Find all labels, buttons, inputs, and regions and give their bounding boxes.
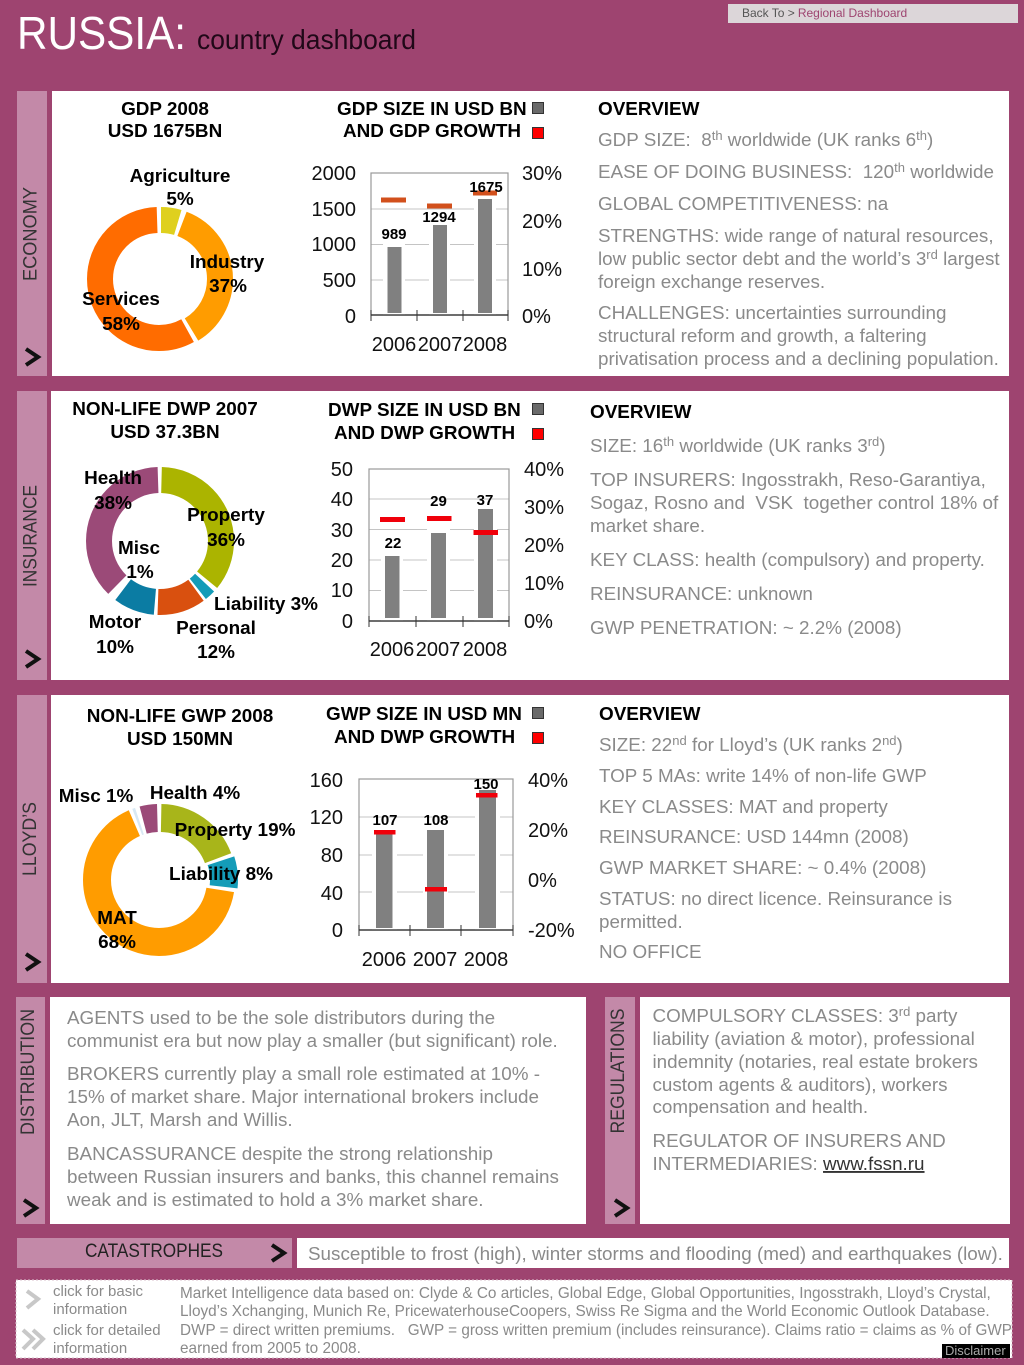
text block: lloyd's overview: nd — [672, 733, 687, 748]
text block: regulations: rd — [899, 1004, 910, 1019]
donut chart: non-life DWP by class: Misc — [118, 538, 160, 559]
text block: regulations: party — [910, 1005, 958, 1026]
text block: insurance overview: SIZE: 16 — [590, 435, 663, 456]
disclaimer button: Disclaimer — [945, 1343, 1006, 1358]
bar chart: DWP — [331, 459, 564, 661]
bar chart: DWP: 0% — [524, 611, 553, 633]
text block: sources: Market Intelligence data based on: Clyde & Co articles, Global Edge, Global Opportunities, Ingosstrakh, Lloyd’s Crystal, — [180, 1285, 991, 1302]
insurance side tab — [17, 391, 47, 680]
text block: economy overview: worldwide — [905, 161, 994, 182]
heading: GDP 2008: GDP 2008 — [121, 99, 209, 120]
text block: insurance overview: rd — [868, 434, 879, 449]
donut chart: non-life DWP by class: 36% — [207, 530, 245, 551]
donut chart: GDP by sector: Agriculture — [130, 166, 230, 187]
bar chart: GWP: 108 — [423, 812, 449, 829]
text block: economy overview — [598, 99, 1000, 369]
icon: single chevron key — [27, 1291, 38, 1308]
bar chart: GDP: 2008 — [463, 334, 507, 356]
bar chart: GDP: 1294 — [422, 209, 456, 226]
donut chart: non-life GWP by class: Liability 8% — [169, 864, 273, 885]
bar chart: DWP: 30% — [524, 497, 564, 519]
bar chart: GWP: 0 — [332, 920, 343, 942]
text block: lloyd's overview: ) — [897, 734, 903, 755]
heading: non-life DWP 2007 — [72, 399, 258, 443]
text block: regulations: indemnity (notaries, real estate brokers — [652, 1051, 978, 1072]
bar chart: GDP: 500 — [323, 270, 356, 292]
text block: economy overview: th — [712, 128, 723, 143]
donut chart: GDP by sector: 5% — [166, 189, 194, 210]
text block: insurance overview: KEY CLASS: health (compulsory) and property. — [590, 549, 985, 570]
distribution side tab — [16, 997, 45, 1224]
text block: insurance overview: OVERVIEW — [590, 402, 692, 423]
heading: GDP size and growth with legend: AND GDP GROWTH — [343, 121, 521, 142]
title: RUSSIA: — [17, 7, 186, 59]
text block: regulations: custom agents & auditors), workers — [652, 1074, 948, 1095]
donut chart: GDP by sector: 58% — [102, 314, 140, 335]
bar chart: GWP: 160 — [310, 770, 343, 792]
text block: economy overview: GDP SIZE: 8 — [598, 129, 712, 150]
bar chart: DWP: 2008 — [463, 639, 507, 661]
donut chart: non-life DWP by class: 1% — [126, 562, 154, 583]
text block: insurance overview: market share. — [590, 515, 705, 536]
catastrophes tab: CATASTROPHES — [85, 1241, 223, 1262]
text block: economy overview: OVERVIEW — [598, 99, 700, 120]
panel: catastrophes — [17, 1238, 1009, 1268]
bar chart: GDP: 20% — [522, 211, 562, 233]
text block: lloyd's overview: NO OFFICE — [599, 941, 702, 962]
donut chart: non-life DWP by class: 38% — [94, 493, 132, 514]
donut chart: GDP by sector: Services — [82, 289, 160, 310]
bar chart: GWP: -20% — [528, 920, 575, 942]
text block: insurance overview: Sogaz, Rosno and VSK together control 18% of — [590, 492, 999, 513]
bar chart: DWP: 50 — [331, 459, 353, 481]
text block: lloyd's overview: nd — [882, 733, 897, 748]
donut chart: non-life GWP by class: Property 19% — [175, 820, 296, 841]
text block: economy overview: rd — [926, 247, 938, 262]
text block: lloyd's overview: REINSURANCE: USD 144mn (2008) — [599, 826, 909, 847]
text block: distribution channels: 15% of market share. Major international brokers include — [67, 1086, 539, 1107]
bar chart: GDP: 2006 — [372, 334, 416, 356]
donut chart: GDP by sector: 37% — [209, 276, 247, 297]
text block: lloyd's overview: OVERVIEW — [599, 704, 701, 725]
panel: lloyd's — [17, 695, 1009, 983]
icon: double chevron key — [23, 1330, 43, 1349]
bar chart: GWP: 80 — [321, 845, 343, 867]
donut chart: non-life GWP by class: MAT — [97, 908, 137, 929]
text block: sources: Lloyd’s Xchanging, Munich Re, PricewaterhouseCoopers, Swiss Re Sigma and the World Economic Outlook Database. — [180, 1303, 990, 1320]
donut chart: non-life DWP by class: Motor — [89, 612, 142, 633]
heading: GDP 2008 — [108, 99, 222, 142]
panel: distribution — [16, 997, 586, 1224]
heading: GWP size and growth with legend: AND DWP GROWTH — [334, 727, 515, 748]
heading: non-life DWP 2007: NON-LIFE DWP 2007 — [72, 399, 258, 420]
text block: economy overview: CHALLENGES: uncertainties surrounding — [598, 302, 946, 323]
distribution side tab: DISTRIBUTION — [18, 1009, 39, 1135]
bar chart: DWP: 20 — [331, 550, 353, 572]
heading: non-life DWP 2007: USD 37.3BN — [110, 422, 220, 443]
heading: GWP size and growth with legend — [326, 704, 544, 748]
text block: lloyd's overview: SIZE: 22 — [599, 734, 672, 755]
bar chart: GDP: 10% — [522, 259, 562, 281]
donut chart: non-life DWP by class: Property — [187, 505, 265, 526]
text block: distribution channels: between Russian insurers and banks, this channel remains — [67, 1166, 559, 1187]
text block: regulations — [652, 1004, 978, 1174]
text block: distribution channels: BROKERS currently play a small role estimated at 10% - — [67, 1063, 540, 1084]
text block: regulations: compensation and health. — [652, 1096, 868, 1117]
text block: lloyd's overview: for Lloyd’s (UK ranks 2 — [687, 734, 882, 755]
title — [17, 7, 416, 59]
panel: economy — [17, 91, 1009, 376]
bar chart: GDP: 0% — [522, 306, 551, 328]
heading: non-life GWP 2008 — [87, 706, 273, 750]
text block: distribution channels: AGENTS used to be the sole distributors during the — [67, 1007, 495, 1028]
bar chart: GDP: 1500 — [312, 199, 356, 221]
text block: key: information — [53, 1340, 127, 1357]
text block: insurance overview: worldwide (UK ranks 3 — [674, 435, 868, 456]
heading: DWP size and growth with legend: DWP SIZE IN USD BN — [328, 400, 521, 421]
donut chart: non-life DWP by class: Liability 3% — [214, 594, 318, 615]
heading: GDP size and growth with legend — [337, 99, 544, 142]
text block: sources: DWP = direct written premiums. GWP = gross written premium (includes reinsurance). Claims ratio = claims as % of GWP — [180, 1322, 1012, 1339]
regulations side tab — [605, 997, 635, 1224]
text block: economy overview: th — [894, 160, 905, 175]
text block: sources: earned from 2005 to 2008. — [180, 1340, 361, 1357]
text block: economy overview: foreign exchange reserves. — [598, 271, 825, 292]
bar chart: GWP: 20% — [528, 820, 568, 842]
text block: key: information — [53, 1301, 127, 1318]
bar chart: GWP: 150 — [473, 776, 499, 793]
back link bar — [728, 4, 1018, 23]
bar chart: DWP: 37 — [477, 492, 493, 509]
text block: insurance overview: th — [663, 434, 674, 449]
heading: GDP size and growth with legend: GDP SIZE IN USD BN — [337, 99, 527, 120]
text block: economy overview: ) — [927, 129, 933, 150]
text block: insurance overview: TOP INSURERS: Ingosstrakh, Reso-Garantiya, — [590, 469, 986, 490]
donut chart: non-life DWP by class — [84, 468, 318, 663]
catastrophes tab — [17, 1238, 292, 1268]
bar chart: GDP: 30% — [522, 163, 562, 185]
text block: insurance overview: ) — [879, 435, 886, 456]
bar chart: DWP: 20% — [524, 535, 564, 557]
text block: regulations: COMPULSORY CLASSES: 3 — [652, 1005, 899, 1026]
bar chart: GWP: 40% — [528, 770, 568, 792]
bar chart: GDP: 0 — [345, 306, 356, 328]
economy side tab — [17, 91, 47, 376]
panel: insurance — [17, 391, 1009, 680]
bar chart: DWP: 2006 — [370, 639, 414, 661]
bar chart: GWP: 0% — [528, 870, 557, 892]
text block: insurance overview — [590, 402, 999, 638]
heading: non-life GWP 2008: USD 150MN — [127, 729, 233, 750]
text block: economy overview: structural reform and growth, a faltering — [598, 325, 927, 346]
text block: regulations: INTERMEDIARIES: www.fssn.ru — [652, 1153, 925, 1174]
text block: distribution channels: Aon, JLT, Marsh and Willis. — [67, 1109, 293, 1130]
text block: economy overview: GLOBAL COMPETITIVENESS: na — [598, 193, 889, 214]
text block: regulations: liability (aviation & motor), professional — [652, 1028, 975, 1049]
heading: GDP 2008: USD 1675BN — [108, 121, 222, 142]
heading: GWP size and growth with legend: GWP SIZE IN USD MN — [326, 704, 522, 725]
regulations side tab: REGULATIONS — [608, 1008, 629, 1134]
bar chart: GDP: 1675 — [469, 179, 503, 196]
bar chart: GWP: 120 — [310, 807, 343, 829]
bar chart: DWP: 10 — [331, 580, 353, 602]
donut chart: non-life GWP by class: Misc 1% — [59, 786, 133, 807]
bar chart: DWP: 29 — [430, 493, 447, 510]
bar chart: DWP: 40% — [524, 459, 564, 481]
text block: insurance overview: REINSURANCE: unknown — [590, 583, 813, 604]
insurance side tab: INSURANCE — [20, 485, 42, 587]
text block: economy overview: STRENGTHS: wide range of natural resources, — [598, 225, 994, 246]
text block: key: click for basic — [53, 1283, 144, 1300]
text block: economy overview: low public sector debt and the world’s 3 — [598, 248, 926, 269]
panel: regulations — [605, 997, 1010, 1224]
bar chart: GDP: 2007 — [418, 334, 462, 356]
text block: lloyd's overview — [599, 704, 952, 962]
heading: DWP size and growth with legend — [328, 400, 544, 444]
bar chart: GDP: 989 — [381, 226, 407, 243]
donut chart: non-life DWP by class: Personal — [176, 618, 256, 639]
text block: economy overview: th — [916, 128, 927, 143]
donut chart: non-life GWP by class: 68% — [98, 932, 136, 953]
text block: regulations: REGULATOR OF INSURERS AND — [652, 1130, 946, 1151]
title: country dashboard — [197, 24, 416, 55]
bar chart: DWP: 2007 — [416, 639, 460, 661]
text block: lloyd's overview: permitted. — [599, 911, 683, 932]
bar chart: GWP: 2006 — [362, 949, 406, 971]
text block: catastrophes summary: Susceptible to frost (high), winter storms and flooding (med) and earthquakes (low). — [308, 1243, 1003, 1264]
bar chart: GWP: 2008 — [464, 949, 508, 971]
donut chart: GDP by sector: Industry — [190, 252, 265, 273]
donut chart: non-life DWP by class: Health — [84, 468, 142, 489]
text block: lloyd's overview: TOP 5 MAs: write 14% of non-life GWP — [599, 765, 927, 786]
bar chart: GWP — [310, 770, 575, 971]
text block: economy overview: worldwide (UK ranks 6 — [723, 129, 916, 150]
donut chart: non-life GWP by class — [59, 783, 296, 953]
donut chart: non-life DWP by class: 10% — [96, 637, 134, 658]
bar chart: DWP: 30 — [331, 520, 353, 542]
text block: lloyd's overview: KEY CLASSES: MAT and property — [599, 796, 888, 817]
text block: economy overview: privatisation process and a declining population. — [598, 348, 999, 369]
text block: lloyd's overview: STATUS: no direct licence. Reinsurance is — [599, 888, 952, 909]
bar chart: GDP — [312, 163, 562, 356]
bar chart: DWP: 0 — [342, 611, 353, 633]
bar chart: GDP: 1000 — [312, 234, 356, 256]
donut chart: non-life DWP by class: 12% — [197, 642, 235, 663]
text block: key — [53, 1283, 161, 1357]
heading: DWP size and growth with legend: AND DWP GROWTH — [334, 423, 515, 444]
panel: footer notes — [16, 1280, 1012, 1358]
bar chart: GWP: 107 — [372, 812, 398, 829]
text block: distribution channels: communist era but now play a smaller (but significant) role. — [67, 1030, 558, 1051]
donut chart: non-life GWP by class: Health 4% — [150, 783, 240, 804]
bar chart: DWP: 22 — [385, 535, 401, 552]
bar chart: GDP: 2000 — [312, 163, 356, 185]
economy side tab: ECONOMY — [20, 187, 42, 281]
text block: sources — [180, 1285, 1012, 1357]
text block: distribution channels: weak and is estimated to hold a 3% market share. — [66, 1189, 484, 1210]
donut chart: GDP by sector — [82, 166, 265, 338]
back link bar: Back To >Regional Dashboard — [742, 6, 907, 20]
text block: economy overview: EASE OF DOING BUSINESS: 120 — [598, 161, 894, 182]
text block: lloyd's overview: GWP MARKET SHARE: ~ 0.4% (2008) — [599, 857, 926, 878]
bar chart: GWP: 2007 — [413, 949, 457, 971]
lloyd's side tab — [17, 695, 47, 983]
bar chart: DWP: 10% — [524, 573, 564, 595]
lloyd's side tab: LLOYD’S — [20, 802, 41, 876]
bar chart: GWP: 40 — [321, 883, 343, 905]
text block: economy overview: largest — [938, 248, 1000, 269]
text block: insurance overview: GWP PENETRATION: ~ 2.2% (2008) — [590, 617, 902, 638]
heading: non-life GWP 2008: NON-LIFE GWP 2008 — [87, 706, 273, 727]
bar chart: DWP: 40 — [331, 489, 353, 511]
text block: distribution channels: BANCASSURANCE despite the strong relationship — [67, 1143, 493, 1164]
text block: distribution channels — [66, 1007, 559, 1210]
text block: key: click for detailed — [53, 1322, 161, 1339]
